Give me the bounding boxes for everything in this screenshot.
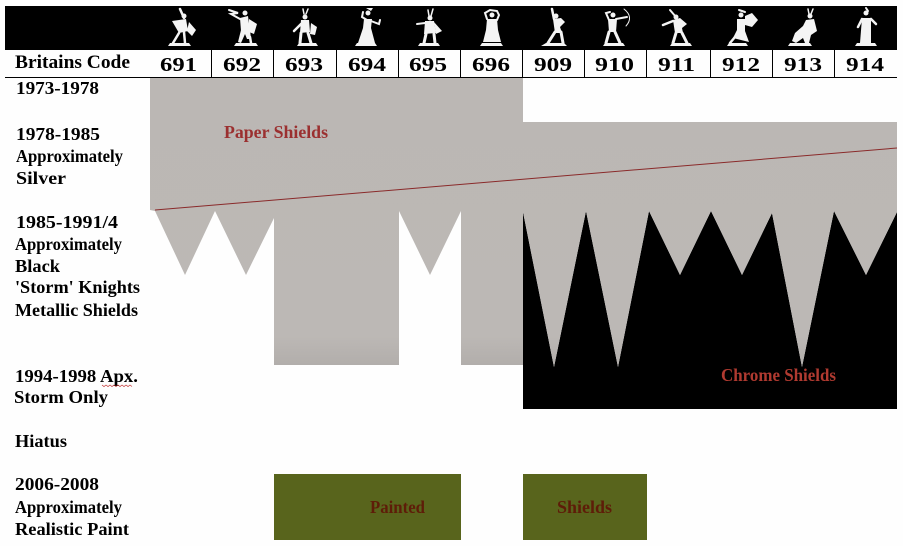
icon: figure 696 [480,10,503,46]
period labels: Approximately [15,234,122,254]
icon: figure 693 [294,9,318,46]
period labels: Black [15,256,60,276]
spellcheck underline [102,385,132,386]
code numbers: 912 [722,54,760,76]
label: Shields: Shields [557,497,612,517]
code numbers: 910 [595,54,634,76]
code numbers: 911 [658,54,695,76]
icon: figure 694 [355,8,380,46]
icon: figure 692 [229,10,258,46]
period labels: Approximately [16,146,123,166]
icon: figure 695 [417,9,442,46]
period labels: 'Storm' Knights [15,277,140,297]
code numbers: 696 [472,54,510,76]
icon: figure 914 [855,8,877,46]
code numbers: 695 [409,54,447,76]
icon: figure 691 [168,9,196,46]
red divider line [155,148,897,210]
period labels: 1985-1991/4 [16,212,118,232]
header band with figures [5,6,897,50]
period labels: 2006-2008 [15,474,99,494]
heading: Britains Code: Britains Code [15,52,130,73]
period labels: 1994-1998 Apx. [15,366,138,386]
code numbers: 692 [223,54,261,76]
period labels: Storm Only [14,387,108,407]
code numbers: 693 [285,54,323,76]
period labels: Realistic Paint [15,519,129,539]
chart: grey paper and silver shields area [150,78,897,367]
label: Painted: Painted [370,497,425,517]
code numbers: 909 [534,54,572,76]
icon: figure 913 [788,9,817,46]
icon: figure 912 [727,10,758,46]
period labels [14,78,140,539]
code numbers: 913 [784,54,822,76]
code numbers: 914 [846,54,884,76]
period labels: Approximately [15,497,122,517]
period labels: 1978-1985 [16,124,100,144]
label: Chrome Shields: Chrome Shields [721,365,836,385]
icon: figure 910 [603,9,630,46]
code numbers: 694 [348,54,386,76]
period labels: Metallic Shields [15,300,138,320]
code row [5,50,897,78]
period labels: Silver [16,168,66,188]
icon: figure 911 [663,10,692,46]
code numbers [160,54,884,76]
period labels: 1973-1978 [16,78,99,98]
chart: painted shields bar right [523,474,647,540]
chart: painted shields bar left [274,474,461,540]
chart: black chrome shields area [523,211,897,409]
period labels: Hiatus [15,431,67,451]
code numbers: 691 [160,54,197,76]
label: Paper Shields: Paper Shields [224,122,328,142]
icon: figure 909 [541,9,567,46]
